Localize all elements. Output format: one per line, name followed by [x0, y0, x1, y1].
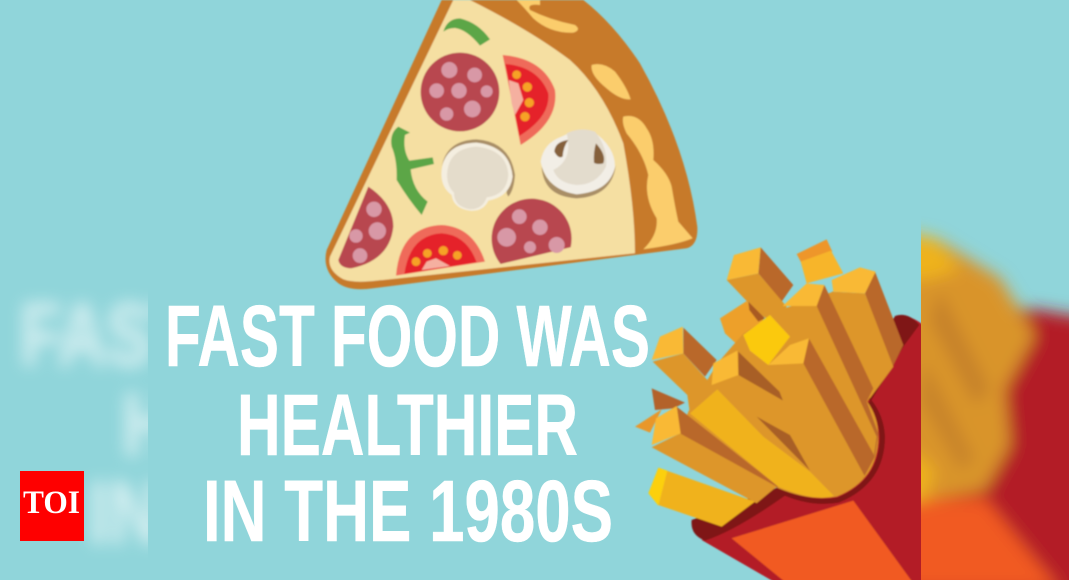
- pizza slice: [326, 0, 697, 289]
- headline line 3: IN THE 1980S: [203, 463, 613, 560]
- mushroom right: [541, 130, 616, 198]
- carton orange front: [732, 501, 913, 580]
- mushroom left: [441, 139, 515, 211]
- fry behind orange: [719, 300, 764, 344]
- pizza crust: [326, 0, 697, 289]
- fry left upper: [652, 327, 717, 414]
- blurred left panel: HEALTHIER: [122, 375, 522, 474]
- green pepper top: [443, 18, 490, 46]
- TOI logo: TOI: [23, 485, 80, 521]
- pizza cheese: [329, 0, 635, 282]
- tomato right: [503, 55, 555, 145]
- fry center tall: [780, 283, 878, 460]
- headline: [165, 288, 650, 560]
- headline line 2: HEALTHIER: [237, 377, 578, 474]
- tomato bottom: [396, 225, 485, 276]
- fries core mass: [680, 292, 892, 498]
- fry right: [832, 267, 903, 398]
- headline line 1: FAST FOOD WAS: [165, 288, 650, 385]
- fry small behind left: [635, 388, 685, 433]
- crust cheese blobs: [517, 0, 693, 249]
- fry center front: [768, 338, 875, 487]
- carton back rim: [868, 314, 920, 402]
- fry middle: [711, 350, 810, 470]
- fry bottom left: [648, 468, 755, 527]
- blurred left panel: [15, 294, 148, 551]
- fry lower left: [652, 406, 778, 503]
- blurred right panel: [900, 232, 1069, 580]
- fry yellow tip: [743, 315, 790, 365]
- salami top: [421, 53, 499, 131]
- salami bottom right: [492, 199, 572, 264]
- blurred left panel: FAST FOOD WAS: [20, 285, 580, 384]
- fry top left: [727, 247, 793, 325]
- fry back small: [797, 239, 843, 283]
- TOI logo: [20, 471, 84, 541]
- salami left half: [338, 187, 393, 268]
- carton front left rim: [691, 487, 785, 541]
- carton red body: [702, 316, 923, 580]
- french fries carton: [635, 239, 923, 580]
- green pepper left: [391, 127, 434, 215]
- blurred left panel: IN THE 1980S: [88, 463, 558, 562]
- fry big yellow: [690, 389, 834, 498]
- carton bottom rim curve: [780, 402, 882, 501]
